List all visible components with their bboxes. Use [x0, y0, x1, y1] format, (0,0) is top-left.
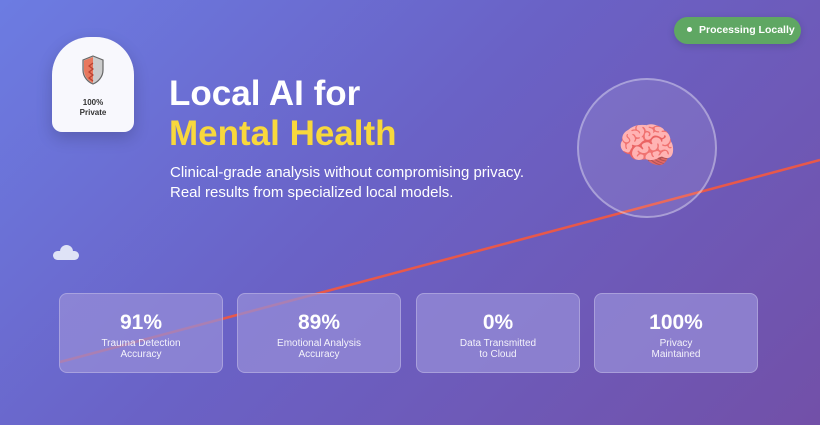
stat card: privacy maintained: Maintained [652, 349, 700, 360]
icon: shield [82, 55, 104, 85]
icon: cloud [53, 245, 79, 260]
brain circle [577, 78, 717, 218]
subtitle: Real results from specialized local models. [170, 184, 453, 201]
stat card: emotional analysis: Emotional Analysis [277, 338, 361, 349]
stat card: data transmitted: to Cloud [479, 349, 517, 360]
privacy badge card: 100% [83, 98, 103, 107]
stat card: privacy maintained: Privacy [660, 338, 692, 349]
stat card: data transmitted [416, 293, 580, 373]
stat card: trauma detection: Accuracy [120, 349, 162, 360]
stat card: trauma detection: Trauma Detection [101, 338, 181, 349]
stat card: trauma detection [59, 293, 223, 373]
stat card: emotional analysis: Accuracy [298, 349, 340, 360]
subtitle: Clinical-grade analysis without compromising privacy. [170, 164, 524, 181]
brain circle: 🧠 [617, 120, 677, 173]
privacy badge card [52, 37, 134, 132]
title: Mental Health [169, 114, 397, 153]
status pill: processing locally [674, 17, 801, 44]
title: Local AI for [169, 74, 360, 113]
stat card: privacy maintained [594, 293, 758, 373]
privacy badge card: Private [80, 108, 106, 117]
stat card: emotional analysis: 89% [298, 311, 340, 334]
stat card: privacy maintained: 100% [649, 311, 703, 334]
subtitle [170, 164, 524, 201]
status pill: processing locally: Processing Locally [699, 24, 795, 36]
stat card: data transmitted: Data Transmitted [460, 338, 536, 349]
stat card: data transmitted: 0% [483, 311, 513, 334]
stat card: emotional analysis [237, 293, 401, 373]
title [169, 74, 397, 153]
stat card: trauma detection: 91% [120, 311, 162, 334]
